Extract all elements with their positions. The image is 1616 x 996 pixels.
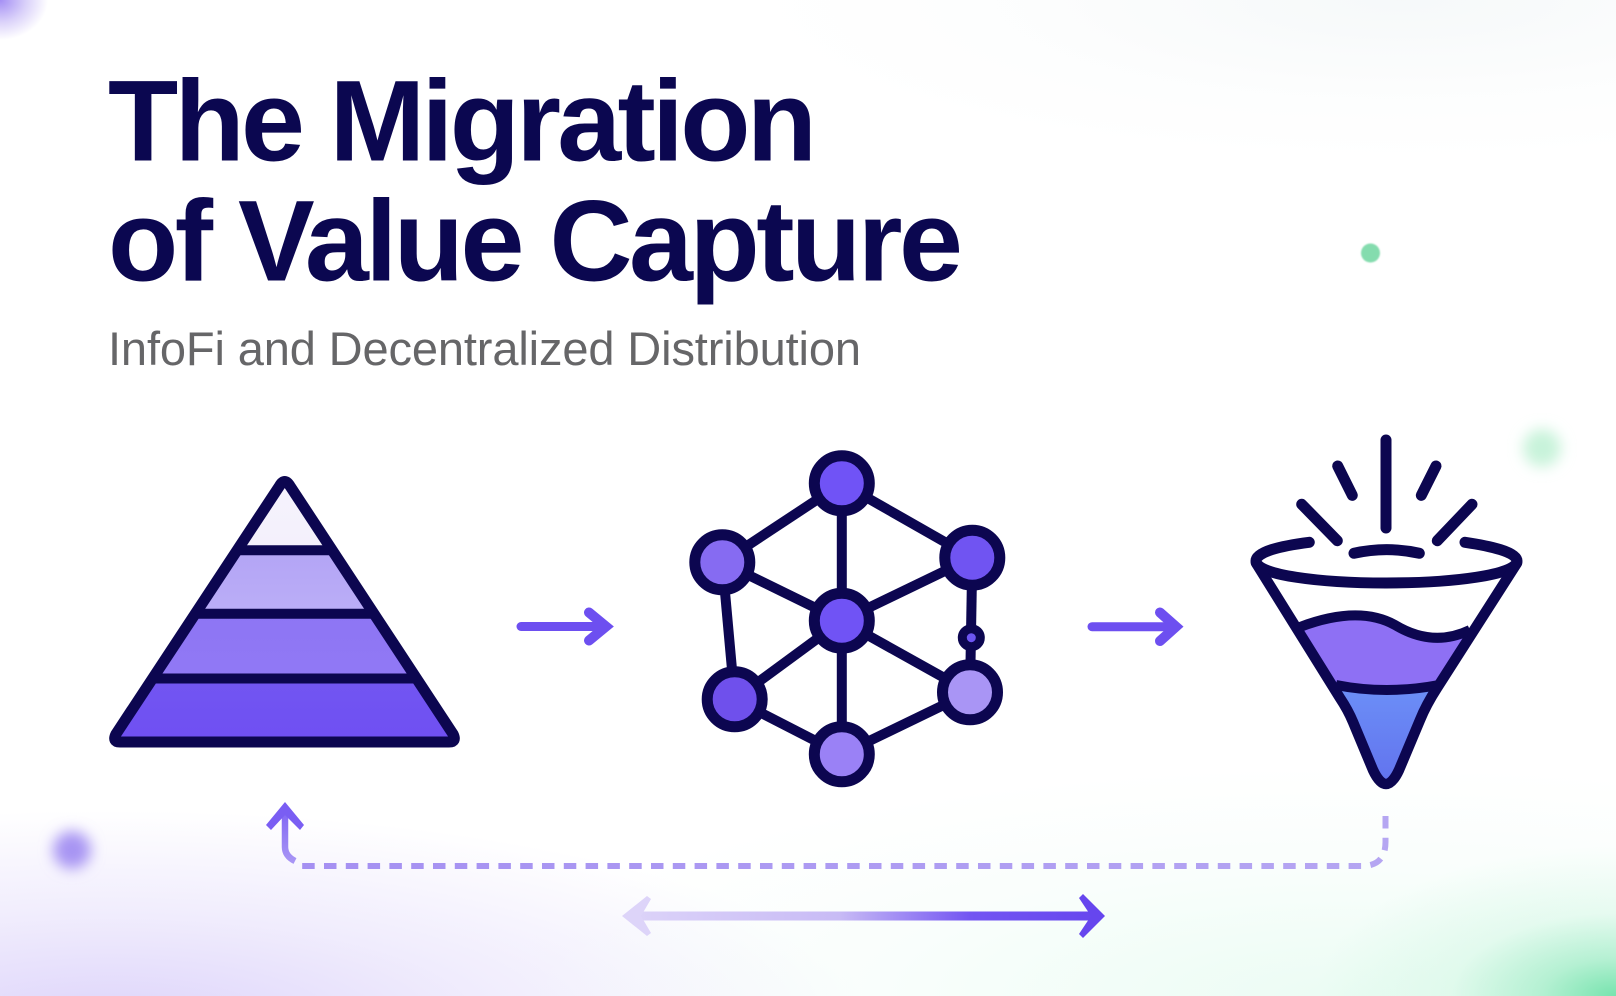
left arrow head bbox=[622, 896, 651, 936]
dashed feedback loop bbox=[266, 802, 1386, 866]
right arrow head bbox=[1079, 894, 1105, 938]
funnel liquid wave bbox=[1300, 615, 1470, 638]
title bbox=[108, 58, 963, 306]
arrow shaft bbox=[628, 912, 1098, 920]
dashed line bbox=[300, 816, 1386, 866]
pyramid dividers bbox=[153, 550, 416, 678]
title: of Value Capture bbox=[108, 178, 963, 306]
pyramid tier 4 bbox=[116, 678, 453, 742]
icon: network bbox=[695, 456, 1000, 782]
pyramid tier 3 bbox=[153, 614, 416, 678]
funnel rim bbox=[1256, 542, 1517, 583]
funnel blue liquid bbox=[1338, 686, 1438, 782]
icon: pyramid bbox=[115, 482, 454, 742]
title: The Migration bbox=[108, 58, 817, 186]
feedback arrow head and stem bbox=[285, 810, 295, 861]
network edges bbox=[722, 483, 972, 754]
pyramid tier 1 bbox=[237, 483, 332, 550]
decorative blurred purple dot bbox=[53, 831, 91, 869]
funnel purple liquid bbox=[1300, 615, 1470, 690]
network nodes bbox=[695, 456, 1000, 782]
decorative green dot bbox=[1361, 244, 1380, 262]
funnel lower divider bbox=[1336, 685, 1439, 690]
funnel rays bbox=[1302, 440, 1472, 553]
funnel body outline bbox=[1256, 563, 1517, 784]
arrow: pyramid to network bbox=[521, 612, 606, 640]
subtitle: InfoFi and Decentralized Distribution bbox=[108, 322, 861, 375]
arrow: network to funnel bbox=[1092, 612, 1176, 641]
decorative blurred green dot bbox=[1523, 429, 1561, 467]
pyramid outline bbox=[115, 482, 454, 742]
pyramid tier 2 bbox=[196, 550, 374, 614]
double-headed gradient arrow bbox=[622, 894, 1105, 938]
icon: funnel bbox=[1256, 440, 1517, 784]
